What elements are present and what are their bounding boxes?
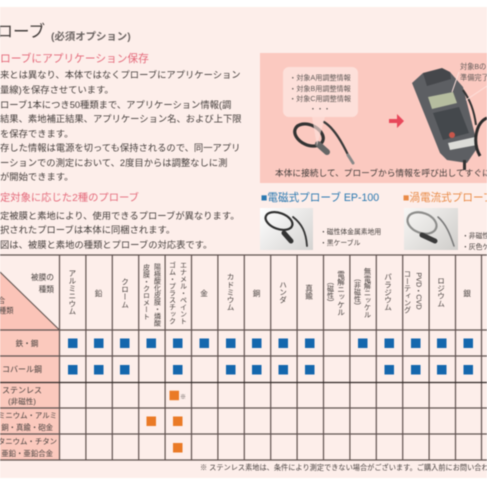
text: electromagnetic probe notes: ・黒ケーブル [320, 240, 360, 246]
text block: application storage: 存した情報は電源を切っても保持されるので、同一アプリ [0, 143, 240, 153]
column headers [68, 261, 471, 328]
text block: application storage: 量線)を保存させています。 [0, 84, 114, 94]
text: electromagnetic probe notes [320, 228, 382, 246]
callout bubble: ・・・ [309, 105, 331, 113]
text block: application storage [0, 70, 242, 182]
column headers: コーティング [404, 270, 412, 314]
column headers: (非磁性) [354, 279, 361, 305]
row headers: コバール鋼 [2, 364, 42, 374]
probe cable [291, 120, 353, 163]
corner header [0, 272, 60, 330]
text block: application storage: 結果、素地補正結果、アプリケーション名、および上下限 [0, 114, 242, 124]
title note: (必須オプション) [51, 32, 131, 43]
text block: application storage: が開始できます。 [0, 172, 73, 182]
device callout [452, 62, 487, 100]
column headers: 無電解ニッケル [364, 267, 372, 318]
column headers: 陽極酸化皮膜・燐酸 [154, 263, 161, 328]
column headers: PVD・CVD [414, 272, 424, 310]
column headers: エナメル・ペイント [180, 262, 187, 325]
text: eddy current probe notes [462, 232, 487, 251]
column headers: パラジウム [383, 273, 392, 311]
panel: probe illustration [260, 53, 487, 183]
text block: application storage: を保存できます。 [0, 128, 73, 138]
row headers: ステンレス [2, 386, 42, 395]
callout bubble: ・対象A用調整情報 [289, 73, 351, 82]
row headers: 鉄・鋼 [16, 338, 39, 348]
heading: electromagnetic probe: ■電磁式プローブ EP-100 [261, 192, 379, 204]
column headers: クローム [120, 277, 130, 308]
blue markers: electromagnetic probe [68, 338, 473, 374]
compatibility table [0, 254, 487, 462]
column headers: 銅 [253, 288, 261, 298]
column headers: 鉛 [95, 288, 103, 298]
column headers: 皮膜・クロメート [142, 263, 150, 320]
column headers: 銀 [463, 288, 471, 298]
column headers: ロジウム [436, 277, 446, 307]
text block: application storage: ーションでの測定において、2度目からは調整なしに測 [0, 158, 227, 168]
corner header: 被膜の [31, 272, 54, 282]
photo: black probe [260, 208, 313, 250]
text block: application storage: 来とは異なり、本体ではなくプローブにアプリケーション [0, 70, 241, 80]
corner header: 種類 [39, 284, 54, 294]
column headers: ゴム・プラスチック [168, 261, 176, 325]
callout bubble: ・対象B用調整情報 [289, 84, 351, 93]
column headers: 真鍮 [304, 283, 314, 301]
text: electromagnetic probe notes: ・磁性体金属素地用 [320, 229, 381, 236]
photo: gray probe [404, 208, 458, 250]
text block: two probes [0, 210, 240, 250]
orange markers: eddy current probe [146, 391, 182, 452]
row headers [0, 330, 60, 460]
device callout: 対象Bの [460, 62, 486, 71]
grid lines [0, 255, 487, 460]
column headers: カドミウム [226, 273, 235, 311]
device [412, 68, 487, 170]
row headers: (非磁性) [8, 396, 36, 406]
column headers: 電解ニッケル [336, 270, 346, 316]
column headers: (磁性) [326, 283, 334, 301]
callout bubble [283, 67, 358, 146]
column headers: アルミニウム [68, 269, 77, 315]
callout bubble: ・対象C用調整情報 [289, 94, 351, 103]
column headers: ハンダ [278, 281, 288, 303]
stainless note mark: ※ [180, 394, 186, 401]
arrow [389, 114, 404, 128]
column headers: 金 [200, 288, 208, 298]
text block: application storage: ローブ1本につき50種類まで、アプリケーション情報(調 [0, 100, 231, 110]
